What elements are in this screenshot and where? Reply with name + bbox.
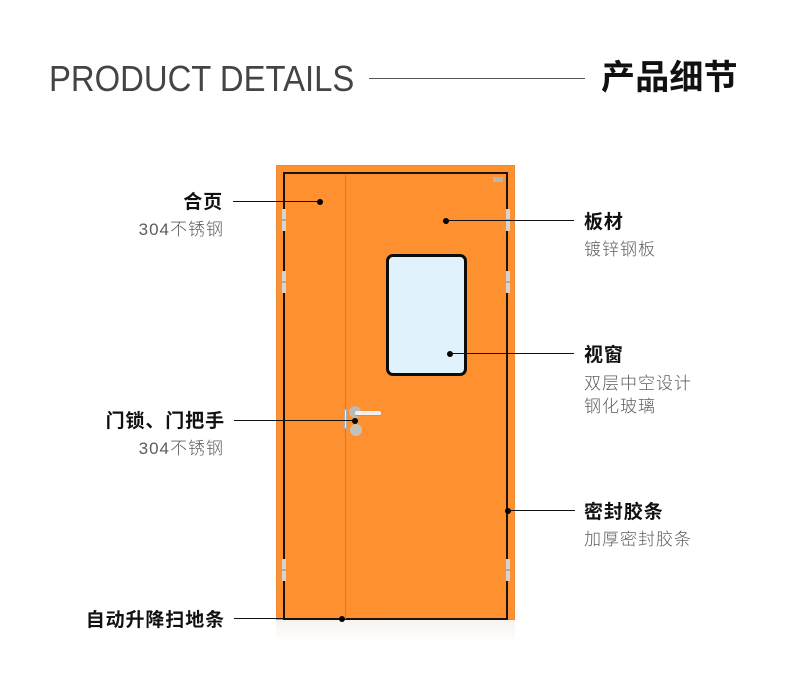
callout: door panel (443, 212, 656, 259)
callout: door panel: 板材 (584, 212, 624, 233)
callout: door panel: 镀锌钢板 (584, 240, 656, 259)
door reflection (276, 620, 515, 642)
callout: hinge (139, 192, 323, 239)
callout: hinge: 304不锈钢 (139, 220, 224, 239)
callout: window: 视窗 (584, 345, 624, 366)
callout: hinge: 合页 (183, 192, 223, 213)
callout: lock and handle (106, 410, 358, 458)
viewing window (386, 254, 467, 376)
door handle and lock (344, 406, 381, 436)
title: chinese heading: 产品细节 (601, 59, 738, 97)
callout: lock and handle: 门锁、门把手 (106, 411, 225, 432)
key cylinder (350, 424, 362, 436)
callout: window: 钢化玻璃 (584, 397, 656, 416)
door frame outline (283, 172, 508, 620)
callout: seal strip: 加厚密封胶条 (584, 530, 692, 549)
lock plate (344, 409, 347, 429)
callout: lock and handle: 304不锈钢 (139, 439, 224, 458)
title: english heading: PRODUCT DETAILS (49, 58, 354, 99)
callout: auto drop sweep (86, 610, 345, 631)
centre seam between leaves (345, 174, 346, 619)
callout: seal strip: 密封胶条 (584, 502, 664, 523)
callout: window (447, 344, 692, 416)
hinges: left (282, 209, 286, 581)
door illustration (276, 165, 515, 620)
handle lever (355, 411, 381, 416)
heading rule (369, 78, 585, 79)
hinges: right (506, 209, 510, 581)
handle rose (349, 406, 361, 418)
callout: window: 双层中空设计 (584, 374, 692, 393)
nameplate (493, 177, 503, 182)
callout: auto drop sweep: 自动升降扫地条 (86, 610, 225, 631)
callout: seal strip (505, 502, 692, 549)
